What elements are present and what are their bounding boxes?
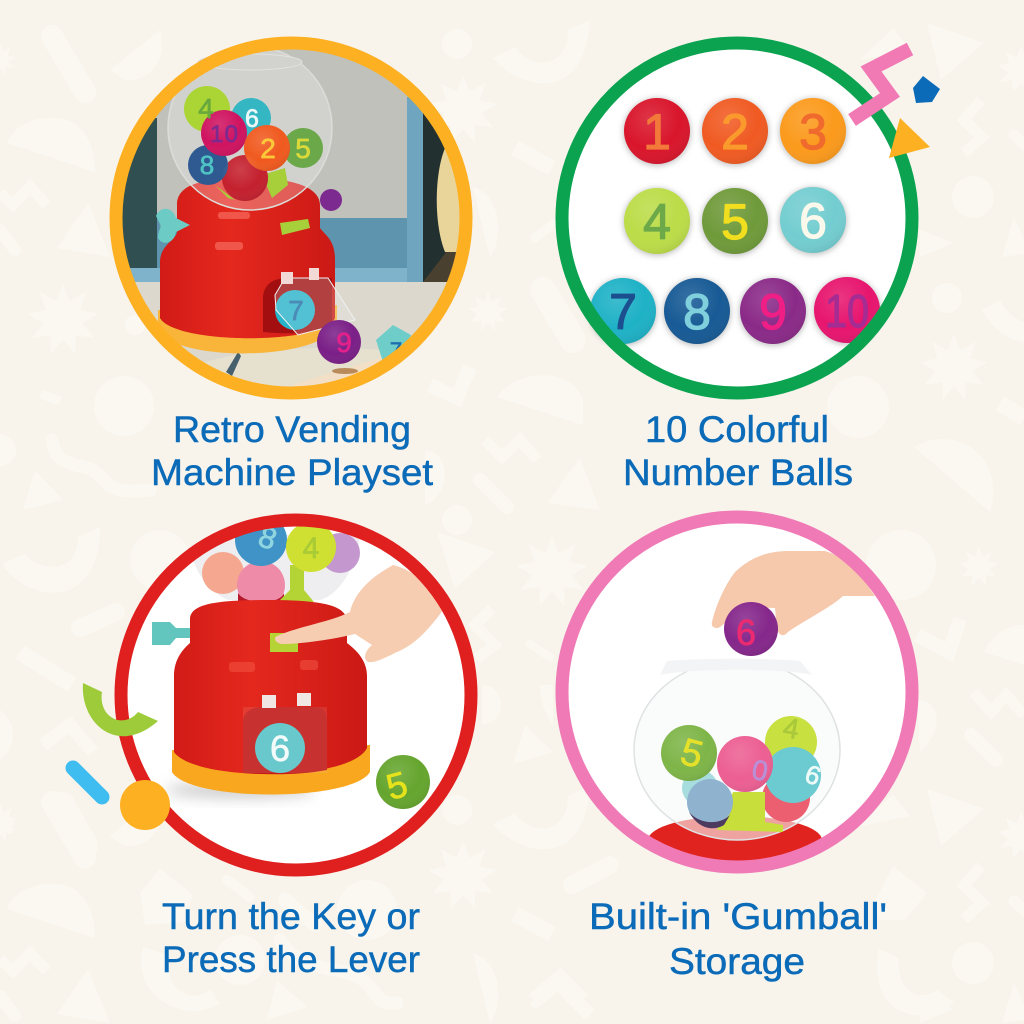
decoration: pink zigzag, blue pentagon, orange triangle	[852, 49, 940, 158]
panel: key and lever	[121, 514, 471, 870]
glass bowl with balls: 6	[801, 758, 825, 792]
machine base	[152, 600, 370, 798]
glass globe with balls: 8	[200, 150, 214, 180]
ball 6 in chute: 6	[270, 728, 290, 769]
hand holding ball	[712, 551, 875, 635]
ball 6 in hand: 6	[736, 612, 756, 653]
ball 10: 10	[825, 285, 869, 337]
glass globe with balls: 6	[245, 105, 259, 133]
chute flap and ball 7	[275, 268, 355, 335]
ball 6: 6	[799, 193, 827, 249]
ball 9: 9	[759, 284, 787, 340]
caption: key and lever: Turn the Key or	[162, 896, 420, 937]
ring: orange	[116, 43, 466, 393]
glass globe with balls: 5	[295, 133, 311, 164]
ball 9 and block: 9	[336, 327, 352, 358]
ball 6 in hand	[724, 602, 778, 656]
ball 9 and block	[317, 320, 411, 364]
gumball machine base	[158, 178, 337, 353]
ball 1: 1	[643, 104, 671, 160]
ball 2: 2	[721, 104, 749, 160]
glass bowl with balls: 5	[676, 731, 707, 777]
glass bowl with balls: 4	[781, 712, 802, 745]
ball 5 on table	[376, 755, 430, 809]
ball 7: 7	[609, 284, 637, 340]
caption: retro vending: Retro Vending	[173, 409, 411, 450]
caption: key and lever: Press the Lever	[162, 939, 420, 980]
ball 5: 5	[721, 194, 749, 250]
ball 5 on table: 5	[382, 763, 412, 808]
glass globe with balls: 2	[260, 133, 276, 164]
ball 9 and block: 7	[390, 338, 402, 363]
chute flap and ball 7: 7	[288, 295, 304, 326]
glass bowl with balls: 0	[750, 754, 770, 787]
ball 5	[701, 188, 769, 256]
decoration: green arc, blue bar, orange dot	[73, 683, 170, 830]
caption: retro vending: Machine Playset	[151, 452, 434, 493]
ring: red	[121, 520, 471, 870]
caption: gumball storage: Storage	[669, 941, 805, 982]
glass globe with balls	[168, 46, 332, 210]
key and knob	[156, 189, 342, 243]
glass bowl with balls	[634, 659, 840, 864]
panel: retro vending machine	[105, 35, 480, 412]
ball 3	[779, 98, 847, 166]
ball 9	[739, 278, 807, 346]
hand pressing lever	[275, 565, 443, 662]
ring: pink	[562, 517, 912, 867]
ring: green	[562, 43, 912, 393]
globe with balls: 4	[303, 532, 319, 565]
ball 2	[701, 98, 769, 166]
ball 6	[779, 187, 847, 255]
photo: room background	[122, 50, 460, 386]
globe with balls: 8	[254, 520, 281, 557]
glass globe with balls: 4	[198, 93, 214, 124]
caption: gumball storage: Built-in 'Gumball'	[589, 896, 887, 937]
ball 8	[663, 278, 731, 346]
ball 1	[623, 98, 691, 166]
ball 4	[623, 188, 691, 256]
ball 7	[589, 278, 657, 346]
globe with balls	[194, 526, 360, 602]
caption: number balls: Number Balls	[623, 452, 853, 493]
caption: number balls: 10 Colorful	[645, 409, 829, 450]
panel: gumball storage	[562, 517, 912, 867]
panel: number balls	[562, 43, 912, 393]
ball 6 in chute	[255, 723, 305, 773]
ball 3: 3	[799, 104, 827, 160]
ball 4: 4	[643, 194, 671, 250]
glass globe with balls: 10	[210, 121, 238, 148]
ball 8: 8	[683, 284, 711, 340]
ball 10	[813, 277, 881, 345]
